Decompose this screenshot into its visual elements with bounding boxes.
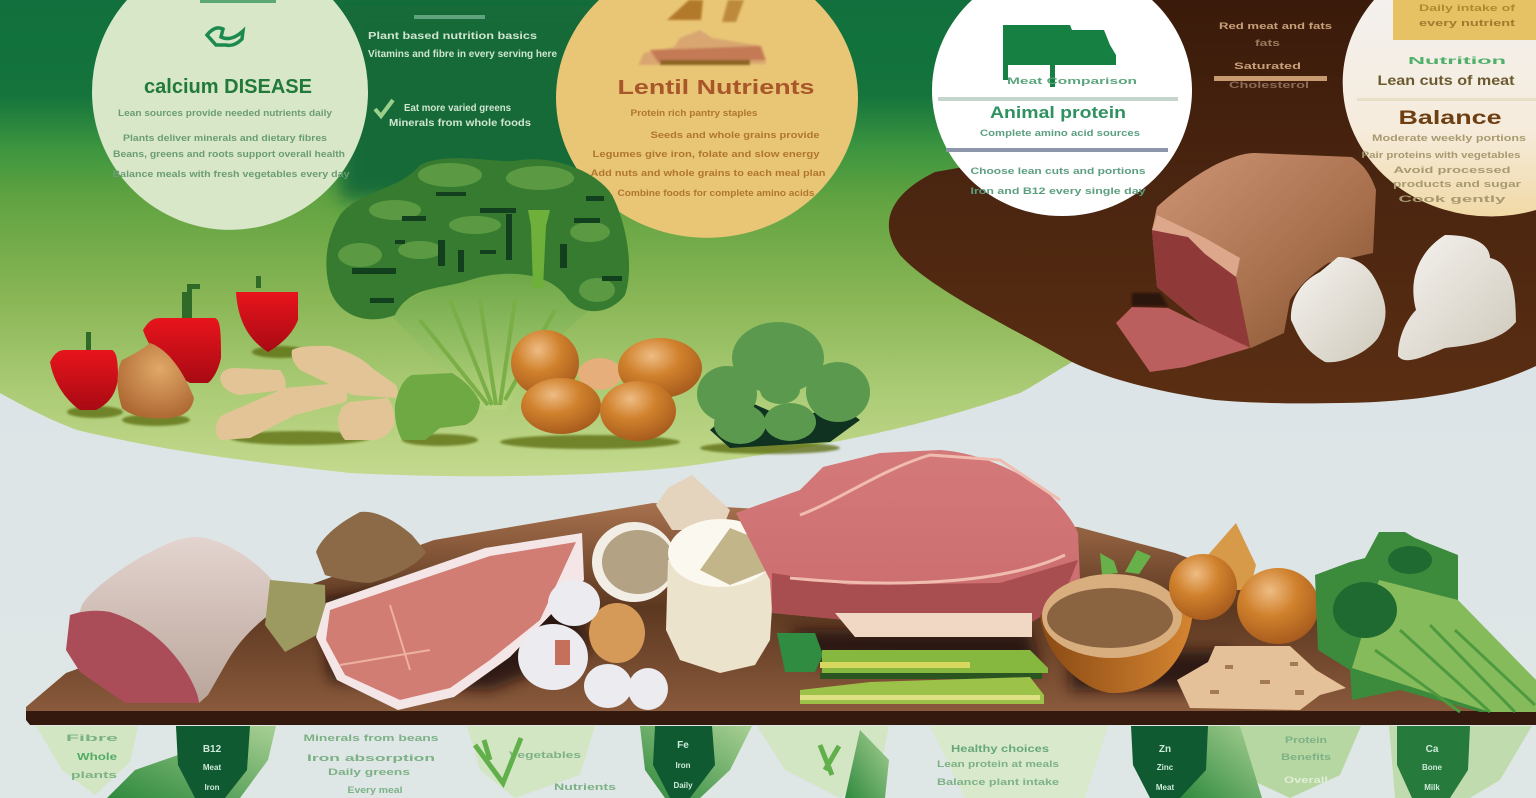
- text block: bottom labels: Lean protein at meals: [937, 759, 1059, 769]
- text block: dark green notes: [368, 15, 557, 129]
- text block: white circle: Complete amino acid sources: [980, 128, 1140, 138]
- heading: cream circle: Balance: [1398, 108, 1502, 129]
- text block: bottom labels: Whole: [77, 752, 118, 763]
- text block: bottom labels: Fibre: [66, 733, 118, 743]
- text block: brown notes: Saturated: [1234, 61, 1301, 71]
- text block: badge labels: [203, 740, 1443, 792]
- icon: potato behind roast: [316, 512, 426, 583]
- icon: beef loaf: [1152, 153, 1376, 348]
- panel: pale green circle: [92, 0, 368, 230]
- subheading: white circle: Animal protein: [990, 103, 1126, 122]
- icon: pork roast: [66, 537, 326, 703]
- text block: badge labels: Ca: [1426, 744, 1439, 755]
- icon: meat slice: [1116, 307, 1250, 372]
- icon: garlic cloves: [518, 580, 668, 710]
- text block: bottom labels: Benefits: [1281, 752, 1331, 762]
- text block: bottom labels: Vegetables: [509, 750, 581, 760]
- icon: grain pile: [1177, 646, 1346, 710]
- text block: bottom labels: [66, 733, 1331, 795]
- text block: bottom labels: plants: [71, 770, 117, 780]
- board: [26, 503, 1536, 712]
- text block: bottom labels: Balance plant intake: [937, 777, 1059, 787]
- icon: leafy greens: [1315, 532, 1536, 712]
- icon: grain plate: [638, 0, 766, 65]
- text block: cream circle: Cook gently: [1398, 194, 1506, 204]
- icon: green stalks: [777, 633, 1048, 704]
- icon: potato: [118, 343, 194, 419]
- heading: tan circle: Lentil Nutrients: [618, 77, 814, 99]
- text block: pale green circle: [112, 108, 350, 179]
- text block: badge labels: Meat: [203, 763, 221, 772]
- text block: badge labels: Iron: [204, 783, 220, 792]
- icon: onions: [1169, 523, 1319, 644]
- text block: dark green notes: Minerals from whole foods: [389, 118, 531, 129]
- text block: badge labels: Meat: [1156, 783, 1174, 792]
- illustration: beef loaf and garlic: [1116, 153, 1516, 372]
- text block: white circle: Choose lean cuts and portions: [970, 166, 1146, 176]
- text block: white circle: Iron and B12 every single day: [970, 186, 1146, 196]
- icon: check mark: [375, 100, 393, 116]
- text: cream circle label: Nutrition: [1408, 56, 1506, 67]
- icon: large broccoli: [326, 158, 629, 410]
- icon: garlic bulbs: [1291, 235, 1516, 362]
- panel: brown header field: [889, 0, 1536, 403]
- text block: pale green circle: Plants deliver minerals and dietary fibres: [123, 133, 327, 143]
- text block: white circle: [946, 128, 1168, 196]
- text block: tan circle: Seeds and whole grains provide: [650, 130, 820, 140]
- icon: large steak: [736, 450, 1080, 637]
- text block: bottom labels: Healthy choices: [951, 744, 1050, 755]
- panel: cream circle: [1343, 0, 1536, 216]
- panel: white circle: [932, 0, 1192, 216]
- icon: red peppers: [50, 276, 298, 410]
- pale leaf shapes: [36, 726, 1532, 798]
- text block: pale green circle: Balance meals with fresh vegetables every day: [112, 169, 350, 179]
- text block: badge labels: Zn: [1159, 744, 1171, 755]
- text block: badge labels: Daily: [673, 781, 693, 790]
- text block: cream circle: Avoid processed: [1394, 165, 1510, 175]
- text block: badge labels: B12: [203, 744, 222, 755]
- text block: cream circle: products and sugar: [1393, 179, 1522, 189]
- text block: dark green notes: Eat more varied greens: [404, 103, 511, 114]
- callout: amber tag: [1393, 0, 1536, 40]
- text block: cream circle: Moderate weekly portions: [1372, 133, 1526, 143]
- icon: broccoli right: [697, 322, 870, 448]
- heading: pale green circle: calcium DISEASE: [144, 76, 312, 98]
- text block: tan circle: Add nuts and whole grains to each meal plan: [590, 168, 826, 178]
- icon: ham slice: [316, 533, 584, 710]
- icon: small broccoli: [395, 373, 480, 440]
- text block: brown notes: Cholesterol: [1229, 80, 1309, 90]
- text block: cream circle: Pair proteins with vegetables: [1362, 150, 1520, 160]
- text block: bottom labels: Minerals from beans: [304, 733, 438, 743]
- text block: cream circle: [1362, 133, 1526, 204]
- heading: white circle: Meat Comparison: [1007, 76, 1137, 86]
- text block: dark green notes: Vitamins and fibre in every serving here: [368, 49, 557, 60]
- text block: badge labels: Zinc: [1157, 763, 1174, 772]
- text block: brown notes: Red meat and fats: [1219, 21, 1332, 31]
- text block: bottom labels: Protein: [1285, 735, 1327, 745]
- green wedges: [107, 726, 1262, 798]
- text block: bottom labels: Every meal: [348, 785, 402, 795]
- shadows under produce: [67, 346, 840, 454]
- text block: tan circle: Legumes give iron, folate and slow energy: [592, 149, 820, 159]
- text: cream circle sublabel: Lean cuts of meat: [1378, 72, 1515, 88]
- text block: badge labels: Fe: [677, 740, 689, 751]
- panel: bottom strip: [36, 726, 1532, 798]
- text block: bottom labels: Nutrients: [554, 782, 616, 792]
- board shadows: [320, 560, 1230, 690]
- illustration: cutting board with meats: [26, 450, 1536, 725]
- icon: white beans: [216, 346, 398, 440]
- icon: herb sprigs: [475, 738, 839, 783]
- text block: badge labels: Bone: [1422, 763, 1443, 772]
- dark green centre band: [340, 0, 600, 200]
- text block: tan circle: [590, 108, 826, 198]
- text block: brown notes: fats: [1255, 38, 1280, 48]
- text block: badge labels: Milk: [1424, 783, 1440, 792]
- panel: green header field: [0, 0, 1110, 476]
- icon: green animal silhouette: [1003, 25, 1116, 87]
- callout: amber tag: Daily intake of: [1419, 3, 1517, 13]
- icon: small leaf: [207, 28, 243, 45]
- illustration: vegetable group: [50, 158, 870, 454]
- icon: potatoes and onions: [511, 330, 702, 441]
- text block: brown notes: [1214, 21, 1332, 90]
- text block: bottom labels: Overall: [1284, 775, 1328, 785]
- panel: tan circle: [556, 0, 858, 238]
- text block: dark green notes: Plant based nutrition basics: [368, 31, 538, 42]
- text block: bottom labels: Iron absorption: [307, 753, 435, 763]
- callout: amber tag: every nutrient: [1419, 18, 1515, 28]
- icon: bowl and cup: [592, 475, 775, 673]
- text block: tan circle: Combine foods for complete amino acids: [618, 188, 814, 198]
- text block: badge labels: Iron: [675, 761, 691, 770]
- text block: bottom labels: Daily greens: [328, 767, 410, 777]
- icon: lentil bowl: [1040, 550, 1193, 693]
- badges: [176, 726, 1470, 798]
- text block: tan circle: Protein rich pantry staples: [630, 108, 758, 118]
- text block: pale green circle: Lean sources provide needed nutrients daily: [118, 108, 332, 118]
- text block: pale green circle: Beans, greens and roots support overall health: [113, 149, 345, 159]
